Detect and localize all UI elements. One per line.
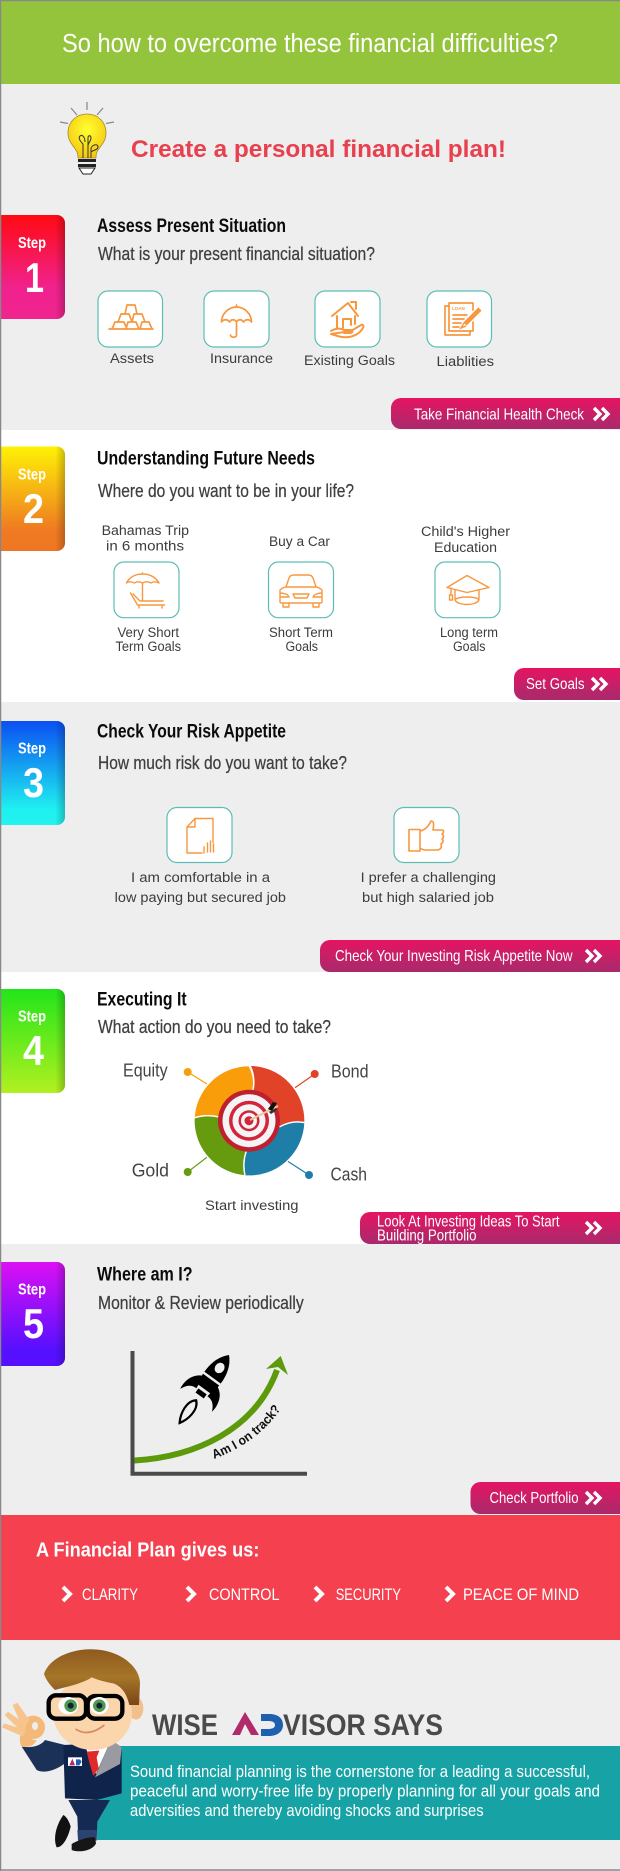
- panel: step 3: [1, 721, 620, 972]
- step badge 2: [1, 446, 65, 551]
- chart label: equity: Equity: [123, 1061, 168, 1081]
- panel: step 4: [1, 972, 620, 1244]
- benefit: control: [187, 1585, 280, 1604]
- advisor heading: [152, 1709, 443, 1742]
- step badge 3: Step: [18, 740, 46, 758]
- chart: portfolio wheel: [184, 1065, 319, 1179]
- button: investing ideas: Building Portfolio: [377, 1228, 477, 1244]
- option text 1: I am comfortable in a: [131, 870, 271, 885]
- label: Assets: [110, 351, 154, 366]
- advisor heading: VISOR SAYS: [283, 1709, 443, 1742]
- icon: graduation cap: [435, 562, 500, 618]
- goal text: months: in 6 months: [106, 538, 184, 554]
- option text 2: I prefer a challenging: [361, 870, 496, 885]
- label: very short: Very Short: [118, 625, 179, 640]
- button: set goals: [514, 668, 620, 700]
- step badge 4: 4: [23, 1027, 45, 1074]
- panel: step 5: [1, 1262, 620, 1514]
- panel: step 1: [1, 215, 620, 429]
- heading: Assess Present Situation: [97, 216, 286, 237]
- caption: Start investing: [205, 1198, 298, 1213]
- benefit: security: SECURITY: [336, 1585, 401, 1604]
- heading: Understanding Future Needs: [97, 448, 315, 470]
- goal text: education: Education: [434, 540, 497, 555]
- header banner: [0, 0, 620, 84]
- benefits heading: A Financial Plan gives us:: [36, 1540, 259, 1562]
- step badge 4: Step: [18, 1008, 46, 1026]
- main heading: Create a personal financial plan!: [131, 136, 506, 163]
- button: set goals: Set Goals: [526, 676, 584, 693]
- question: What action do you need to take?: [98, 1016, 331, 1037]
- icon: light bulb: [60, 102, 114, 174]
- label: Insurance: [210, 351, 273, 366]
- icon: liabilities: [427, 291, 492, 347]
- label: short term: Short Term: [269, 625, 333, 640]
- icon: insurance: [204, 291, 269, 347]
- step badge 2: Step: [18, 466, 46, 484]
- question: Monitor & Review periodically: [98, 1292, 304, 1313]
- label: term goals: Term Goals: [116, 639, 181, 654]
- step badge 3: [1, 721, 65, 825]
- heading: Where am I?: [97, 1265, 193, 1286]
- heading: Check Your Risk Appetite: [97, 722, 286, 742]
- icon: existing goals: [315, 291, 380, 347]
- step badge 2: 2: [23, 485, 44, 532]
- button: risk appetite: [320, 940, 620, 972]
- icon: liabilities: LOAN: [452, 306, 465, 311]
- step badge 5: Step: [18, 1282, 46, 1298]
- step badge 5: 5: [23, 1300, 44, 1347]
- panel: wise advisor: [2, 1649, 620, 1851]
- button: investing ideas: Look At Investing Ideas To Start: [377, 1214, 560, 1230]
- chart label: bond: Bond: [331, 1062, 368, 1082]
- benefit: peace of mind: PEACE OF MIND: [463, 1585, 579, 1604]
- heading: Executing It: [97, 990, 187, 1010]
- option text 2 line 2: but high salaried job: [362, 890, 494, 905]
- advisor heading: WISE: [152, 1709, 218, 1742]
- question: How much risk do you want to take?: [98, 752, 347, 773]
- panel: benefits: [1, 1515, 620, 1640]
- title: So how to overcome these financial difficulties?: [62, 30, 558, 58]
- step badge 4: [1, 989, 65, 1093]
- chart label: cash: Cash: [330, 1165, 367, 1185]
- icon: rocket: [163, 1343, 245, 1435]
- benefit: security: [315, 1585, 401, 1604]
- question: Where do you want to be in your life?: [98, 480, 354, 501]
- quote text: adversities and thereby avoiding shocks and surprises: [130, 1801, 484, 1820]
- panel: step 2: [1, 430, 620, 702]
- step badge 5: [1, 1262, 65, 1366]
- button: portfolio: Check Portfolio: [490, 1490, 579, 1507]
- button: health check: [391, 398, 620, 429]
- label: long term: Long term: [440, 625, 498, 640]
- button: risk appetite: Check Your Investing Risk Appetite Now: [335, 948, 573, 965]
- goal text: child: Child's Higher: [421, 524, 511, 539]
- label: Existing Goals: [304, 353, 395, 368]
- label: goals: Goals: [286, 639, 318, 654]
- icon: assets: [98, 291, 162, 347]
- icon: target: [218, 1090, 280, 1152]
- benefit: clarity: CLARITY: [82, 1585, 138, 1604]
- label: Liablities: [436, 354, 494, 369]
- icon: car: [268, 562, 334, 618]
- button: portfolio: [470, 1482, 620, 1514]
- step badge 1: Step: [18, 235, 46, 252]
- step badge 1: [1, 215, 65, 319]
- goal text: bahamas: Bahamas Trip: [102, 523, 189, 538]
- button: health check: Take Financial Health Check: [414, 406, 585, 424]
- chart label: gold: Gold: [132, 1161, 169, 1181]
- step badge 3: 3: [23, 759, 44, 806]
- character: advisor: [2, 1649, 143, 1851]
- teal quote band: [97, 1746, 620, 1840]
- chart: growth curve: Am I on track?: [214, 1405, 279, 1459]
- goal text: car: Buy a Car: [269, 534, 331, 549]
- label: goals: Goals: [453, 639, 486, 654]
- button: investing ideas: [360, 1212, 620, 1244]
- icon: document chart: [167, 808, 232, 862]
- quote text: [130, 1762, 600, 1820]
- option text 1 line 2: low paying but secured job: [115, 890, 286, 905]
- chart: growth curve: [130, 1351, 307, 1476]
- curved label: [214, 1397, 288, 1459]
- benefit: control: CONTROL: [209, 1585, 280, 1604]
- step badge 1: 1: [25, 254, 44, 301]
- question: What is your present financial situation?: [98, 243, 375, 264]
- benefit: clarity: [63, 1585, 138, 1604]
- icon: beach chair: [114, 562, 179, 618]
- icon: thumbs up: [394, 808, 459, 862]
